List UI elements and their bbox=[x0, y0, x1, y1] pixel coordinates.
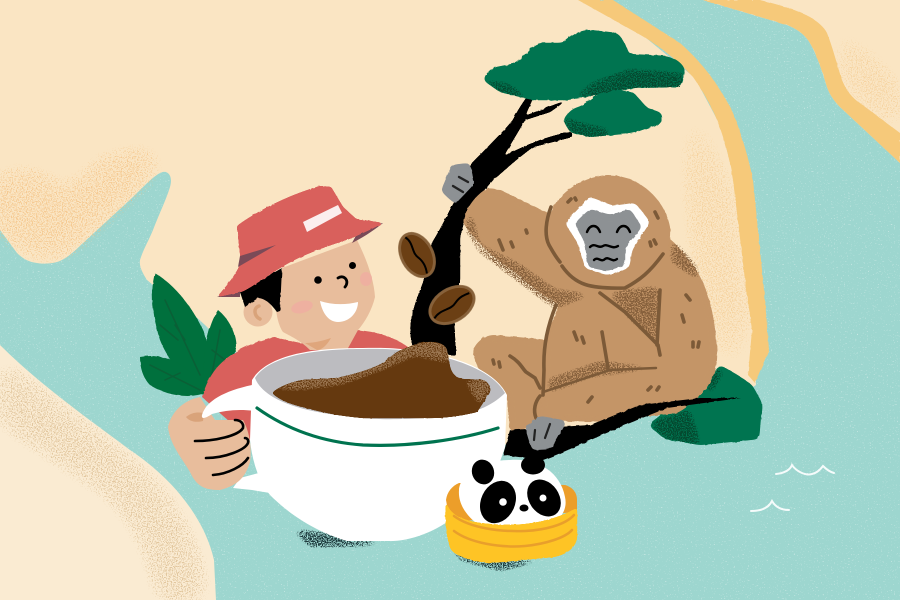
leaf veins bbox=[150, 300, 225, 390]
gibbon face bbox=[575, 209, 642, 271]
basket shadow bbox=[450, 548, 545, 570]
panda bun bbox=[445, 456, 577, 563]
gibbon face mask bbox=[565, 197, 650, 275]
lower branch bbox=[503, 398, 741, 460]
person bbox=[202, 186, 430, 440]
leaf left bbox=[140, 356, 207, 396]
eyes bbox=[314, 262, 356, 284]
cup shadow bbox=[293, 530, 390, 546]
panda nose bbox=[520, 504, 528, 512]
tree bbox=[410, 30, 685, 356]
panda head bbox=[459, 460, 566, 526]
panda right ear bbox=[521, 456, 545, 474]
coffee bean upper bbox=[391, 226, 443, 284]
palm bbox=[168, 397, 251, 490]
leaves bbox=[140, 273, 236, 396]
gibbon bbox=[441, 163, 717, 432]
coffee surface bbox=[272, 342, 490, 418]
gibbon shading chest bbox=[610, 287, 658, 342]
cup inside bbox=[255, 349, 505, 419]
hat stripe bbox=[303, 205, 342, 232]
gibbon shading arm bbox=[466, 210, 590, 308]
canopy small shade bbox=[564, 118, 610, 137]
hat bbox=[217, 186, 383, 297]
beach band right bbox=[703, 0, 900, 163]
canopy small bbox=[563, 90, 662, 137]
coffee bean lower bbox=[422, 277, 482, 333]
cup stripe bbox=[257, 408, 498, 445]
panda right eye patch bbox=[520, 473, 568, 523]
gibbon shading belly bbox=[548, 362, 655, 392]
ear bbox=[244, 298, 272, 326]
fingers bbox=[195, 420, 248, 475]
canopy top shade bbox=[483, 70, 685, 102]
shirt bbox=[202, 330, 430, 440]
smile bbox=[320, 301, 358, 322]
gibbon shading shoulder bbox=[672, 240, 700, 280]
main land bbox=[0, 0, 756, 452]
steamer basket bbox=[445, 500, 577, 563]
beach band left bbox=[578, 0, 769, 383]
gibbon leg bbox=[473, 335, 560, 432]
hat band bbox=[238, 245, 276, 267]
panda left ear bbox=[468, 456, 498, 488]
sand stipple near the bay bbox=[0, 150, 160, 255]
waves lower bbox=[751, 501, 789, 511]
panda eyes bbox=[499, 494, 546, 506]
head bbox=[276, 240, 375, 350]
leaf large bbox=[152, 273, 210, 396]
gibbon hand bbox=[441, 163, 474, 204]
cup body bbox=[250, 348, 507, 541]
hair bbox=[240, 268, 282, 312]
gibbon foot bbox=[525, 416, 567, 450]
handle arc bbox=[202, 385, 254, 418]
coffee highlight bbox=[278, 342, 490, 403]
neck shade bbox=[305, 338, 331, 350]
sand stipple near the shore bbox=[690, 110, 746, 370]
gibbon features bbox=[587, 226, 630, 260]
steamer lines bbox=[454, 515, 574, 546]
cup handle bbox=[233, 470, 270, 493]
far shore top right bbox=[703, 0, 900, 163]
sand bottom left bbox=[0, 345, 216, 600]
gibbon body and arm bbox=[463, 188, 717, 422]
cup bbox=[233, 338, 507, 541]
gibbon fur lines bbox=[493, 198, 699, 418]
far shore stipple bbox=[835, 30, 900, 125]
hand bbox=[168, 385, 254, 490]
tree trunk and branches bbox=[410, 97, 572, 356]
waves upper bbox=[776, 465, 834, 474]
cheeks bbox=[290, 272, 372, 316]
leaf right bbox=[203, 310, 236, 396]
ear inner bbox=[255, 306, 260, 319]
panda left eye patch bbox=[473, 475, 523, 529]
gibbon head bbox=[547, 175, 670, 291]
thumb shade bbox=[186, 412, 204, 422]
hat underside bbox=[217, 223, 383, 297]
nose bbox=[338, 277, 347, 287]
canopy top bbox=[483, 30, 685, 100]
bush behind branch bbox=[648, 365, 762, 445]
steamer inner bbox=[446, 483, 577, 522]
